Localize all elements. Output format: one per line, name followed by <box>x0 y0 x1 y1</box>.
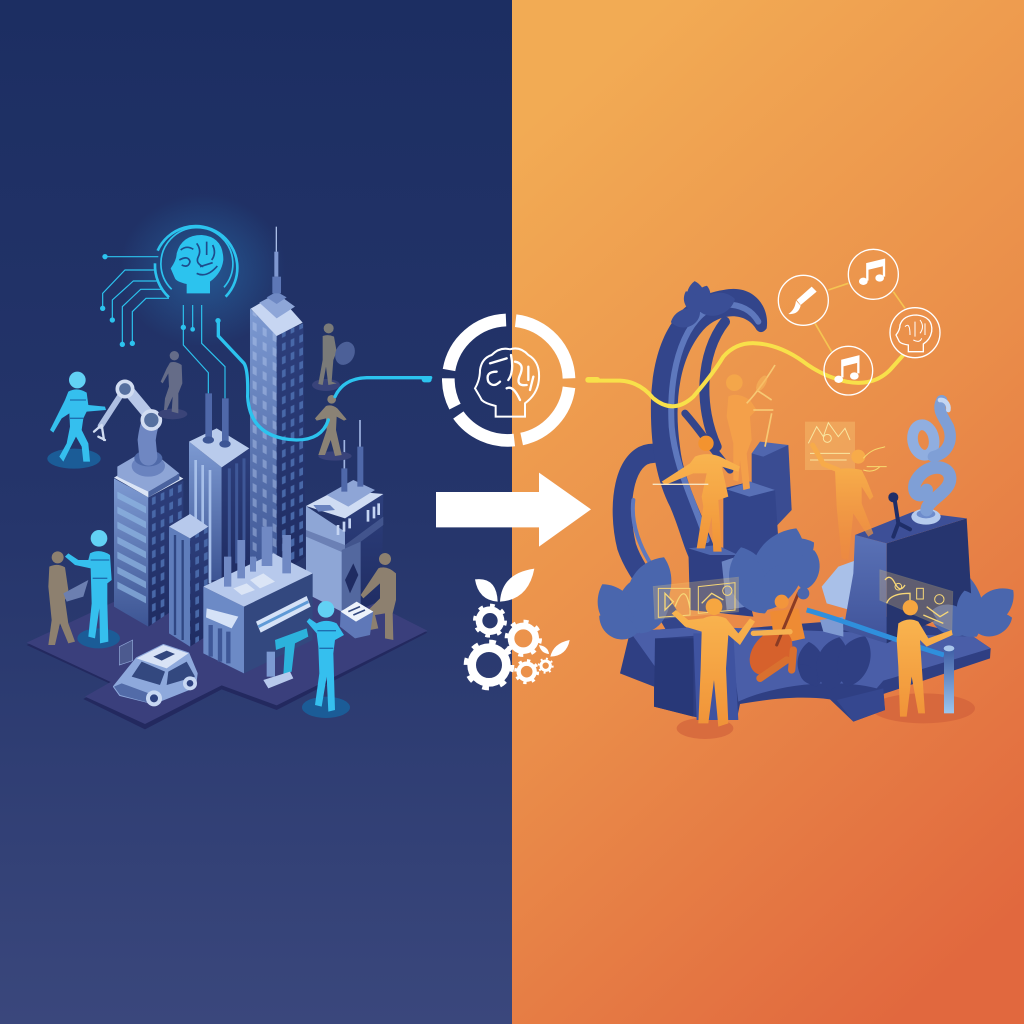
brain glow <box>119 193 286 347</box>
gear middle <box>507 622 540 655</box>
flow line stubs beside the ring <box>422 377 600 383</box>
person: with tablet <box>48 551 88 645</box>
holographic screen: right panel <box>880 570 953 631</box>
person: viewer at left screen <box>672 598 755 727</box>
plant: dark front leaves <box>794 630 878 692</box>
icon: music note top <box>848 249 898 299</box>
flowing yellow line <box>588 343 903 406</box>
person: with shield <box>312 323 359 391</box>
plant: right <box>917 553 1022 648</box>
robot figure: lower left <box>65 530 120 648</box>
central icons column <box>422 320 600 688</box>
desk in front of right building <box>340 602 373 638</box>
icon: music note lower <box>824 346 873 395</box>
holographic screen: left panel <box>653 577 738 619</box>
icon: brain in head <box>890 308 940 358</box>
icon: AI head with circuit lines <box>100 226 237 398</box>
icon: industrial robot arm <box>94 381 165 477</box>
city ground platform <box>27 583 427 729</box>
person: walking on the line <box>315 395 352 461</box>
gear small <box>516 661 538 683</box>
plant: leaves in front of pedestal <box>930 582 1011 639</box>
skyscraper: tallest tower <box>250 227 305 577</box>
icon: segmented ring with brain <box>448 320 569 440</box>
plants <box>586 519 1022 648</box>
person: viewer at right screen <box>897 600 953 717</box>
shop awnings <box>206 608 238 628</box>
robot figure: top left <box>47 372 106 469</box>
creative icon network <box>778 249 940 395</box>
person: floating gesturing figure <box>813 445 887 560</box>
arrow: transformation <box>436 473 591 547</box>
right rooftop building with antennas <box>306 420 383 617</box>
people silhouettes in grey <box>48 323 396 645</box>
gear top <box>475 606 505 636</box>
robot figure: front <box>302 601 350 718</box>
rock pile <box>822 560 857 610</box>
treble-clef sculpture <box>910 400 950 525</box>
small office building <box>169 514 208 647</box>
icon: gears and leaves <box>466 569 570 688</box>
person: conductor with baton <box>653 436 740 552</box>
arch sculpture <box>622 280 767 637</box>
small display board <box>119 640 133 665</box>
gear large <box>466 642 512 688</box>
icon: paintbrush <box>778 275 828 325</box>
small dark silhouette on plinth <box>888 492 910 537</box>
flow line leaving the city <box>218 321 431 440</box>
factory with chimneys and shopfronts <box>203 527 313 688</box>
car <box>114 645 197 706</box>
main platform <box>620 617 991 722</box>
person: stepping at right <box>361 553 396 640</box>
panel: dark blue technology background <box>0 0 512 1024</box>
illustration: AI smart city <box>27 193 431 729</box>
person: cellist <box>741 587 809 684</box>
gear smallest <box>539 659 553 673</box>
plant: centre <box>719 519 824 621</box>
illustration: creative sculpture garden <box>586 249 1022 739</box>
leaves <box>475 569 570 657</box>
holographic screen: floating top <box>805 422 855 470</box>
person: distant by the robot arm <box>158 351 187 419</box>
skyscraper: striped building with robot arm <box>94 381 183 627</box>
plant: left <box>586 549 681 646</box>
bollard pillar <box>944 645 954 713</box>
sculpture pedestal <box>820 512 972 643</box>
blue ribbon line <box>807 610 944 655</box>
stepped stone plinths <box>688 442 792 617</box>
person: guitarist on top step <box>726 365 775 490</box>
skyscraper: twin antenna building <box>189 393 250 583</box>
ground shadows <box>677 693 975 739</box>
panel: orange creative background <box>512 0 1024 1024</box>
